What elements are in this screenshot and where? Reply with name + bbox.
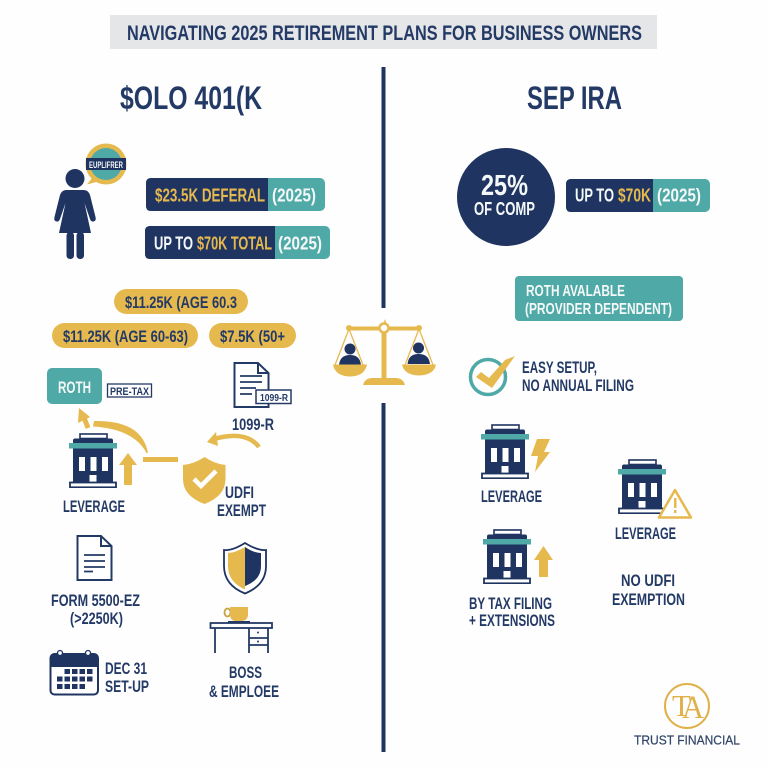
center divider bottom xyxy=(382,403,386,752)
pill: total: $70K TOTAL xyxy=(197,234,272,254)
label: 1099-R: 1099-R xyxy=(232,415,274,434)
pill: deferral xyxy=(146,178,325,211)
callout: roth available: ROTH AVALABLE xyxy=(526,283,625,300)
icon: person with employer badge: EUPLIFRER xyxy=(89,160,123,170)
pill: catch-up age 60: $11.25K (AGE 60.3 xyxy=(125,293,237,312)
label: no UDFI exemption: NO UDFI xyxy=(621,571,675,590)
icon: building with bolt xyxy=(481,425,550,478)
icon: building with warning xyxy=(618,460,691,518)
icon: person with employer badge xyxy=(54,144,126,259)
label: by tax filing: BY TAX FILING xyxy=(469,594,552,613)
logo: trust financial: TRUST FINANCIAL xyxy=(634,732,740,748)
pill: up to 70k: $70K xyxy=(618,186,651,206)
label: no UDFI exemption xyxy=(612,571,685,609)
pill: total xyxy=(145,226,330,259)
center divider top xyxy=(382,67,386,308)
label: boss & employee: & EMPLOEE xyxy=(209,682,279,701)
icon: 1099-R document: 1099-R xyxy=(260,392,288,404)
label: no UDFI exemption: EXEMPTION xyxy=(612,590,685,609)
stat circle: 25% of comp: OF COMP xyxy=(474,199,535,219)
pill: catch-up age 60-63: $11.25K (AGE 60-63) xyxy=(63,327,188,346)
icon: UDFI shield xyxy=(183,457,226,504)
icon: roth box: ROTH xyxy=(58,378,91,397)
logo: trust financial: T xyxy=(672,688,691,723)
label: by tax filing xyxy=(469,594,555,630)
pill: up to 70k: UP TO xyxy=(575,186,614,206)
heading: sep ira: SEP IRA xyxy=(527,80,622,116)
icon: balance scale xyxy=(333,319,436,385)
label: UDFI exempt: UDFI xyxy=(225,483,254,502)
pill: total: (2025) xyxy=(278,234,322,254)
label: leverage left: LEVERAGE xyxy=(63,497,125,516)
pill: up to 70k xyxy=(566,179,710,212)
pill: catch-up 50+ xyxy=(209,323,296,348)
icon: form document xyxy=(78,536,112,580)
logo: trust financial xyxy=(634,684,740,748)
label: form 5500-EZ: (>2250K) xyxy=(70,609,123,628)
label: leverage far right: LEVERAGE xyxy=(615,524,676,543)
icon: calendar xyxy=(50,650,98,694)
label: Dec 31 set-up: SET-UP xyxy=(105,677,149,696)
label: boss & employee xyxy=(209,663,279,701)
icon: desk with cup xyxy=(210,607,272,653)
icon: roth box xyxy=(47,368,102,404)
pill: total: UP TO xyxy=(154,234,193,254)
icon: split shield xyxy=(224,543,266,594)
label: boss & employee: BOSS xyxy=(229,663,262,682)
label: UDFI exempt: EXEMPT xyxy=(217,501,266,520)
arrow: up beside building xyxy=(119,453,137,485)
connector bar xyxy=(143,457,178,462)
icon: 1099-R document xyxy=(234,363,291,407)
text: easy setup xyxy=(522,358,634,395)
callout: roth available xyxy=(515,276,683,321)
stat circle: 25% of comp xyxy=(457,148,555,246)
pill: catch-up age 60-63 xyxy=(52,323,198,348)
text: easy setup: NO ANNUAL FILING xyxy=(522,376,634,395)
icon: building with up arrow xyxy=(483,530,553,583)
pill: up to 70k: (2025) xyxy=(657,186,701,206)
text: easy setup: EASY SETUP, xyxy=(522,358,597,377)
label: Dec 31 set-up: DEC 31 xyxy=(105,659,147,678)
pill: catch-up 50+: $7.5K (50+ xyxy=(220,327,285,346)
label: by tax filing: + EXTENSIONS xyxy=(469,611,555,630)
label: pre-tax: PRE-TAX xyxy=(110,386,150,398)
label: form 5500-EZ xyxy=(51,591,140,628)
label: leverage right: LEVERAGE xyxy=(481,487,542,506)
label: UDFI exempt xyxy=(217,483,266,520)
title xyxy=(110,15,657,49)
arrow: curved to roth xyxy=(93,421,148,453)
pill: catch-up age 60 xyxy=(114,289,248,314)
heading: solo 401k: $OLO 401(K xyxy=(120,80,262,116)
label: form 5500-EZ: FORM 5500-EZ xyxy=(51,591,140,610)
icon: leverage building left xyxy=(69,434,117,487)
pill: deferral: (2025) xyxy=(272,186,316,206)
arrow: curved from 1099-R xyxy=(207,432,259,447)
logo: trust financial: A xyxy=(682,690,704,726)
label: Dec 31 set-up xyxy=(105,659,149,696)
icon: check circle xyxy=(470,356,515,394)
arrow: up to roth xyxy=(78,408,90,428)
stat circle: 25% of comp: 25% xyxy=(481,170,528,202)
pill: deferral: $23.5K DEFERAL xyxy=(155,186,265,206)
callout: roth available: (PROVIDER DEPENDENT) xyxy=(525,301,672,318)
